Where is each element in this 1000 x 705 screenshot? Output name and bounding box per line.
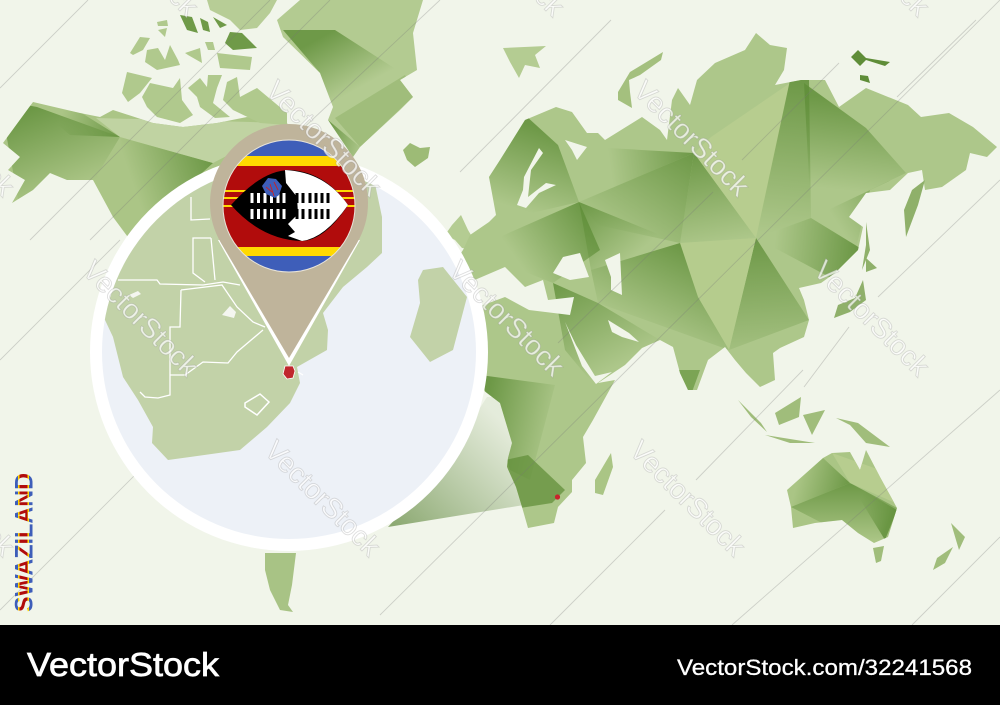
pin white edge (218, 240, 360, 366)
shield (231, 170, 348, 241)
country borders (118, 197, 303, 398)
footer logo: VectorStock (27, 646, 220, 683)
VectorStock watermarks: VectorStock (624, 434, 752, 563)
map: Black Sea (553, 253, 589, 280)
map: Britain (445, 215, 480, 250)
map: White Sea (565, 140, 587, 160)
map: Indonesia (738, 397, 890, 447)
southern Africa land (104, 181, 467, 460)
VectorStock watermarks: VectorStock (259, 434, 387, 563)
map: Novaya Zemlya (618, 52, 663, 108)
map: Madagascar (595, 453, 613, 495)
map: New Zealand (933, 523, 965, 570)
map: Red Sea (565, 322, 612, 384)
map: Swaziland marker on world map (555, 494, 560, 500)
country title: SWAZILAND (10, 473, 38, 612)
VectorStock watermarks: VectorStock (77, 254, 205, 383)
pin body (210, 124, 368, 358)
flag stripes (246, 140, 331, 156)
Swaziland highlighted (283, 366, 295, 379)
Madagascar enlarged (410, 267, 467, 362)
VectorStock watermarks: VectorStock (443, 254, 571, 383)
flag staves (222, 191, 355, 206)
map: Greenland (277, 0, 423, 157)
map: Arctic islands dark (180, 15, 257, 50)
shield bars (252, 193, 284, 219)
map: Caspian Sea (605, 253, 622, 295)
map: Kamchatka and Sakhalin (862, 180, 925, 270)
flag of Swaziland (224, 140, 354, 272)
map: Iceland (403, 143, 430, 167)
map: Svalbard (503, 46, 546, 78)
map: North America (0, 0, 430, 245)
map: Mediterranean sea (470, 267, 574, 315)
VectorStock watermarks: VectorStock (628, 74, 756, 203)
map: Tasmania (873, 546, 884, 563)
map: Eurasia and Africa (430, 25, 1000, 535)
map: Baltic Sea (517, 148, 556, 208)
map: Japan (834, 258, 877, 318)
footer bar (0, 625, 1000, 705)
map: Australia (787, 450, 897, 543)
VectorStock watermarks: VectorStock (260, 74, 388, 203)
Lesotho (245, 394, 269, 415)
VectorStock watermarks: VectorStock (808, 254, 936, 383)
map: Canadian Arctic (122, 20, 287, 125)
location pin with flag (210, 124, 368, 366)
feather tassel (262, 178, 282, 198)
map: Persian Gulf (608, 320, 639, 342)
zoom funnel (388, 397, 530, 527)
VectorStock watermarks (0, 0, 1000, 563)
zoom circle (90, 153, 488, 551)
lakes (129, 291, 236, 318)
footer url: VectorStock.com/32241568 (677, 655, 972, 680)
map: South America tip (265, 553, 296, 612)
map: Severnaya Zemlya (851, 50, 890, 83)
